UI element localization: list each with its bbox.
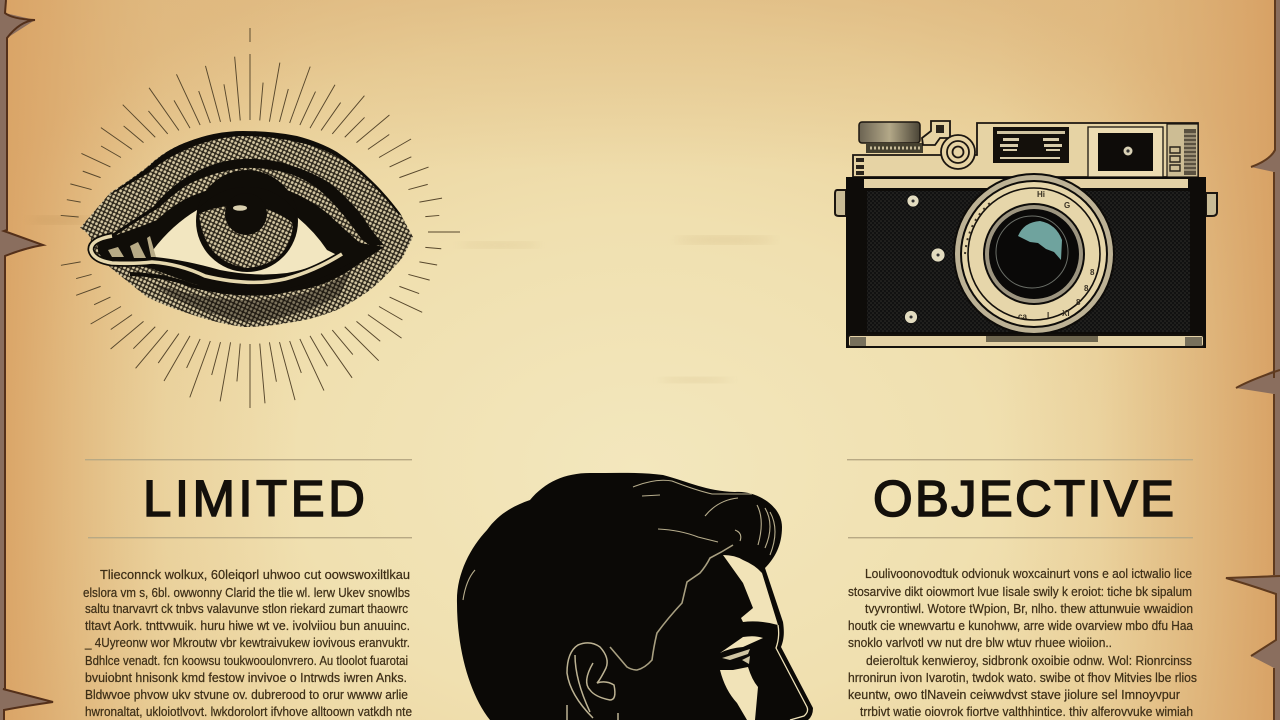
lens [953, 173, 1115, 335]
top strip [864, 179, 1188, 188]
icon: radiant eye [61, 28, 460, 408]
body text: deieroltuk kenwieroy, sidbronk oxoibie odnw. Wol: Rionrcinss [866, 654, 1192, 668]
lens engravings: I [1047, 311, 1049, 320]
advance wheel [941, 135, 975, 169]
icon: vintage camera [835, 121, 1217, 348]
lens engravings: ca [1018, 312, 1027, 321]
viewfinder window [993, 127, 1069, 163]
body text: snoklo varlvotl vw nut dre blw wtuv rhuee wioiion.. [848, 636, 1112, 650]
body [846, 177, 1206, 348]
body text [83, 568, 412, 719]
body text: bvuiobnt hnisonk kmd festow invivoe o Intrwds iwren Anks. [85, 671, 407, 685]
eye highlight [722, 649, 750, 664]
ear [567, 643, 618, 720]
side lugs [835, 190, 1217, 216]
body text: keuntw, owo tlNavein ceiwwdvst stave jiolure sel Imnoyvpur [848, 688, 1180, 702]
body text: tvyvrontiwl. Wotore tWpion, Br, nlho. thew attunwuie wwaidion [865, 602, 1193, 616]
upper lid band [103, 159, 384, 246]
ridged side dial [1167, 124, 1198, 177]
body text: Loulivoonovodtuk odvionuk woxcainurt vons e aol ictwalio lice [865, 567, 1192, 581]
body text: tltavt Aork. tnttvwuik. huru hiwe wt ve. ivolviiou bun anuuinc. [85, 619, 410, 633]
left column: LIMITED [83, 459, 412, 719]
hair strands [463, 480, 775, 600]
right column: OBJECTIVE [847, 459, 1197, 719]
leather texture [867, 191, 1190, 332]
lens engravings: 8 [1090, 268, 1095, 277]
top plate [853, 123, 1198, 177]
left corner detail [856, 158, 864, 175]
eye socket [98, 185, 384, 294]
body text: hwronaltat, ukloiotlvovt. lwkdorolort ifvhove alltoown vatkdh nte [85, 705, 412, 719]
body text: saltu tnarvavrt ck tnbvs valavunve stlon riekard zumart thaowrc [85, 602, 408, 616]
forehead highlight [723, 555, 778, 625]
body text: Tlieconnck wolkux, 60leiqorl uhwoo cut oowswoxiltlkau [100, 568, 410, 582]
iris [196, 170, 298, 272]
halftone almond [80, 132, 413, 327]
screws [904, 195, 945, 324]
body text: elslora vm s, 6bl. owwonny Clarid the tlie wl. lerw Ukev snowlbs [83, 586, 410, 600]
lower shading [150, 270, 352, 322]
rule bottom [848, 537, 1193, 538]
rule bottom [88, 537, 412, 538]
body text: hrronirun ivon Ivarotin, twdok wato. swibe ot fhov Mitvies lbe rlios [848, 671, 1197, 685]
torn right edge [1226, 0, 1280, 720]
sclera [153, 210, 337, 274]
icon: head silhouette in profile [457, 473, 813, 720]
base strip [848, 335, 1204, 347]
body text: trrbivt watie oiovrok fiortve valthhintice. thiv alferovvuke wimiah [860, 705, 1193, 719]
lens engravings: G [1064, 201, 1070, 210]
lower lid [91, 236, 352, 294]
heading: LIMITED [143, 470, 365, 527]
upper outline [108, 131, 402, 216]
sunburst rays [61, 28, 460, 408]
body text: _ 4Uyreonw wor Mkroutw vbr kewtraivukew iovivous eranvuktr. [84, 636, 410, 650]
body text: Bldwvoe phvow ukv stvune ov. dubrerood to orur wwww arlie [85, 688, 408, 702]
silhouette [457, 473, 813, 720]
rangefinder window [1088, 127, 1163, 177]
profile edge line [776, 625, 808, 720]
brow highlight [720, 636, 763, 653]
body text: Bdhlce venadt. fcn koowsu toukwooulonvrero. Au tloolot fuarotai [85, 654, 408, 668]
lens engravings: XI [1062, 309, 1070, 318]
lens engravings: Hi [1037, 190, 1045, 199]
lens engravings: 8 [1084, 284, 1089, 293]
cheek highlight [720, 667, 758, 720]
rule top [847, 459, 1193, 460]
body text [848, 567, 1197, 719]
tear duct stripes [108, 236, 156, 258]
hairline [610, 545, 733, 670]
heading: OBJECTIVE [873, 470, 1174, 527]
torn left edge [0, 0, 53, 720]
lens highlight [1018, 221, 1062, 260]
body text: houtk cie wnewvartu e kunohww, arre wide ovarview mbo dfu Haa [848, 619, 1193, 633]
small knob [922, 121, 950, 145]
rewind dial [859, 122, 923, 153]
body text: stosarvive dikt oiowmort lvue Iisale swily k eroiot: tiche bk sipalum [848, 585, 1192, 599]
rule top [85, 459, 412, 460]
lens engravings: 8 [1076, 298, 1081, 307]
lens engravings [1018, 190, 1095, 321]
